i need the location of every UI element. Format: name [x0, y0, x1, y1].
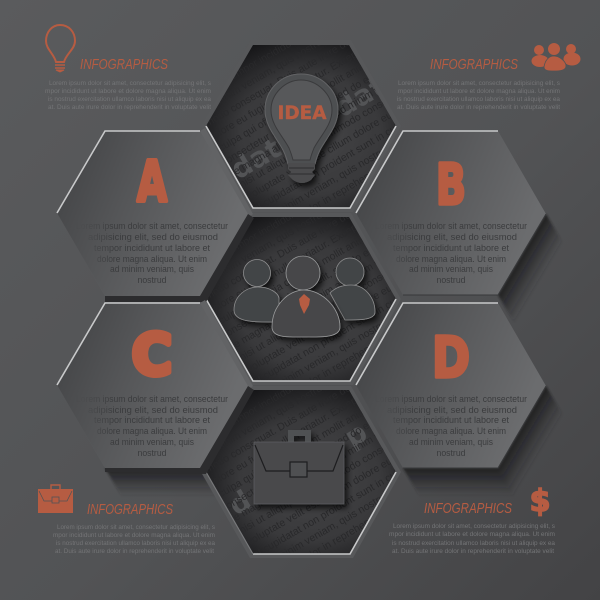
watermark text: bottom hexagon: Ut enim ad minim veniam, quis nostrud exercitation ullamco laboris nisi ut aliquip ex [166, 276, 509, 481]
text block: top right: Lorem ipsum dolor sit amet, consectetur adipisicing elit, s [398, 81, 560, 87]
body text B: ad minim veniam, quis [409, 264, 493, 275]
watermark text: bottom hexagon: Duis aute irure dolor in reprehenderit in voluptate velit esse [236, 454, 480, 600]
watermark text: bottom hexagon: et dolore magna aliqua. Ut enim ad minim veniam, quis nostrud exercitation ullamco [201, 336, 545, 541]
body text C [76, 394, 229, 459]
panel: middle centre hexagon [206, 217, 397, 382]
watermark text: top hexagon: derit in voluptate velit esse cillum dolore eu fugiat nulla pariatur. Excepteur sint [215, 27, 537, 220]
body text A: nostrud [138, 275, 166, 286]
icon: small orange people [532, 43, 580, 71]
watermark text: top hexagon [207, 45, 396, 205]
text block: bottom left: is nostrud exercitation ullamco laboris nisi ut aliquip ex ea [56, 541, 216, 547]
watermark text: bottom hexagon: sunt in culpa qui officia deserunt mollit anim id est laborum. Lorem ipsum dolor sit [187, 318, 520, 517]
body text A: Lorem ipsum dolor sit amet, consectetur [76, 221, 229, 232]
text block: bottom left: mpor incididunt ut labore et dolore magna aliqua. Ut enim [53, 533, 215, 539]
text block: top left: mpor incididunt ut labore et dolore magna aliqua. Ut enim [45, 89, 211, 95]
body text A: tempor incididunt ut labore et [94, 243, 210, 254]
text block: top right: is nostrud exercitation ullamco laboris nisi ut aliquip ex ea [397, 97, 561, 103]
watermark text: middle hexagon: Ut enim ad minim veniam, quis nostrud exercitation ullamco laboris [229, 251, 504, 417]
body text D [375, 394, 528, 459]
panel: hexagon C [57, 300, 254, 474]
text block: bottom left: at. Duis aute irure dolor in reprehenderit in voluptate velit [55, 549, 214, 555]
watermark text: bottom hexagon: d [223, 483, 257, 522]
letter C: C [132, 323, 172, 388]
body text B: Lorem ipsum dolor sit amet, consectetur [375, 221, 528, 232]
body text D: ad minim veniam, quis [409, 437, 493, 448]
watermark text: top hexagon: data [329, 60, 407, 124]
body text A [76, 221, 229, 286]
text block: top left: at. Duis aute irure dolor in reprehenderit in voluptate velit [48, 105, 211, 111]
body text A: dolore magna aliqua. Ut enim [97, 254, 207, 265]
panel: hexagon B [356, 131, 546, 295]
body text D: dolore magna aliqua. Ut enim [396, 426, 506, 437]
watermark text: bottom hexagon: laboris nisi ut aliquip ex ea commodo consequat. Duis aute irure dolor in reprehen [208, 353, 543, 553]
watermark text: top hexagon: occaecat cupidatat non proident sunt in culpa qui officia deserunt mollit anim [222, 44, 535, 232]
letter B: B [436, 153, 466, 218]
watermark text: bottom hexagon: amet, consectetur adipisicing elit, sed do eiusmod tempor incididunt ut labore est [194, 331, 525, 529]
body text B: tempor incididunt ut labore et [393, 243, 509, 254]
text block: bottom right: mpor incididunt ut labore et dolore magna aliqua. Ut enim [389, 532, 555, 538]
watermark text: bottom hexagon: Ut enim ad minim veniam, quis nostrud exercitation ullamco laboris [229, 424, 504, 590]
letter D: D [432, 326, 470, 391]
body text C: tempor incididunt ut labore et [94, 415, 210, 426]
watermark text: bottom hexagon: cillum dolore eu fugiat nulla pariatur. Excepteur sint occaecat cupidatat non proident [180, 300, 523, 505]
text block: top right: mpor incididunt ut labore et dolore magna aliqua. Ut enim [398, 89, 560, 95]
icon: large people group with tie [234, 256, 375, 337]
watermark text: bottom hexagon [228, 390, 396, 551]
body text B: adipisicing elit, sed do eiusmod [387, 232, 517, 243]
watermark text: bottom hexagon: occaecat cupidatat non proident sunt in culpa qui officia deserunt mollit anim [222, 390, 535, 578]
watermark text: middle hexagon: sed do eiusmod tempor incididunt ut labore et dolore magna aliqua enim veniam, ex ea [159, 83, 515, 296]
text block: bottom left [53, 525, 216, 555]
body text D: adipisicing elit, sed do eiusmod [387, 405, 517, 416]
body text A: adipisicing elit, sed do eiusmod [88, 232, 218, 243]
icon: small orange briefcase [38, 485, 73, 513]
watermark text: top hexagon: Duis aute irure dolor in reprehenderit in voluptate velit esse [236, 108, 480, 256]
panel: top centre hexagon [205, 45, 397, 209]
watermark text: middle hexagon: occaecat cupidatat non proident sunt in culpa qui officia deserunt mollit anim [222, 217, 535, 405]
heading: top left: INFOGRAPHICS [80, 57, 168, 73]
body text D: nostrud [436, 448, 466, 459]
watermark text: bottom hexagon: ea commodo consequat. Duis aute irure dolor in reprehenderit in voluptate velit esse [173, 286, 519, 493]
heading: bottom left: INFOGRAPHICS [87, 502, 173, 518]
watermark text: middle hexagon: et dolore magna aliqua. Ut enim ad minim veniam, quis nostrud exercitation ullamco [201, 163, 545, 368]
label: IDEA: IDEA [278, 102, 327, 124]
watermark text: bottom hexagon: p [339, 415, 373, 454]
watermark text: top hexagon: data [225, 122, 303, 186]
body text B [375, 221, 528, 286]
icon: orange tie [299, 294, 310, 314]
body text C: nostrud [138, 448, 166, 459]
body text A: ad minim veniam, quis [110, 264, 194, 275]
body text B: nostrud [436, 275, 466, 286]
watermark text: middle hexagon: sunt in culpa qui officia deserunt mollit anim id est laborum. Lorem ipsum dolor sit [187, 145, 520, 344]
text block: bottom right: Lorem ipsum dolor sit amet, consectetur adipisicing elit, s [393, 524, 555, 530]
watermark text: top hexagon: laboris nisi ut aliquip ex ea commodo consequat. Duis aute irure dolor in reprehen [208, 7, 543, 207]
body text C: ad minim veniam, quis [110, 437, 194, 448]
text block: top left: Lorem ipsum dolor sit amet, consectetur adipisicing elit, s [49, 81, 211, 87]
watermark text: bottom hexagon: sed do eiusmod tempor incididunt ut labore et dolore magna aliqua enim veniam, ex ea [159, 256, 515, 469]
text block: top right: at. Duis aute irure dolor in reprehenderit in voluptate velit [397, 105, 560, 111]
body text C: Lorem ipsum dolor sit amet, consectetur [76, 394, 229, 405]
watermark text: middle hexagon: cillum dolore eu fugiat nulla pariatur. Excepteur sint occaecat cupidatat non proident [180, 127, 523, 332]
panel: hexagon D [356, 303, 546, 468]
body text C: adipisicing elit, sed do eiusmod [88, 405, 218, 416]
text block: bottom right: is nostrud exercitation ullamco laboris nisi ut aliquip ex ea [392, 541, 556, 547]
watermark text: middle hexagon [228, 217, 396, 378]
watermark text: middle hexagon: amet, consectetur adipisicing elit, sed do eiusmod tempor incididunt ut labore est [194, 158, 525, 356]
watermark text: bottom hexagon: derit in voluptate velit esse cillum dolore eu fugiat nulla pariatur. Excepteur sint [215, 373, 537, 566]
body text C: dolore magna aliqua. Ut enim [97, 426, 207, 437]
text block: top left [45, 81, 212, 111]
body text D: Lorem ipsum dolor sit amet, consectetur [375, 394, 528, 405]
watermark text: middle hexagon: laboris nisi ut aliquip ex ea commodo consequat. Duis aute irure dolor in reprehen [208, 180, 543, 380]
icon: dollar sign: $ [530, 484, 550, 519]
watermark text: middle hexagon: ea commodo consequat. Duis aute irure dolor in reprehenderit in voluptate velit esse [173, 113, 519, 320]
watermark text: top hexagon: Ut enim ad minim veniam, quis nostrud exercitation ullamco laboris [229, 78, 504, 244]
body text D: tempor incididunt ut labore et [393, 415, 509, 426]
long shadows [105, 214, 563, 497]
letter A: A [137, 150, 167, 215]
text block: bottom right: at. Duis aute irure dolor in reprehenderit in voluptate velit [392, 549, 554, 555]
icon: large light bulb [265, 74, 338, 183]
body text B: dolore magna aliqua. Ut enim [396, 254, 506, 265]
icon: large briefcase [254, 430, 344, 504]
watermark text: middle hexagon: Duis aute irure dolor in reprehenderit in voluptate velit esse [236, 281, 480, 429]
text block: top right [397, 81, 561, 111]
text block: top left: is nostrud exercitation ullamco laboris nisi ut aliquip ex ea [48, 97, 212, 103]
text block: bottom left: Lorem ipsum dolor sit amet, consectetur adipisicing elit, s [57, 525, 215, 531]
panel: hexagon A [57, 128, 254, 302]
watermark text: middle hexagon: Ut enim ad minim veniam, quis nostrud exercitation ullamco laboris nisi ut aliquip ex [166, 103, 509, 308]
text block: bottom right [389, 524, 556, 555]
watermark text: middle hexagon: derit in voluptate velit esse cillum dolore eu fugiat nulla pariatur. Excepteur sint [215, 200, 537, 393]
heading: bottom right: INFOGRAPHICS [424, 501, 512, 517]
panel: bottom centre hexagon [202, 390, 400, 558]
heading: top right: INFOGRAPHICS [430, 57, 518, 73]
icon: small orange bulb [46, 25, 75, 72]
